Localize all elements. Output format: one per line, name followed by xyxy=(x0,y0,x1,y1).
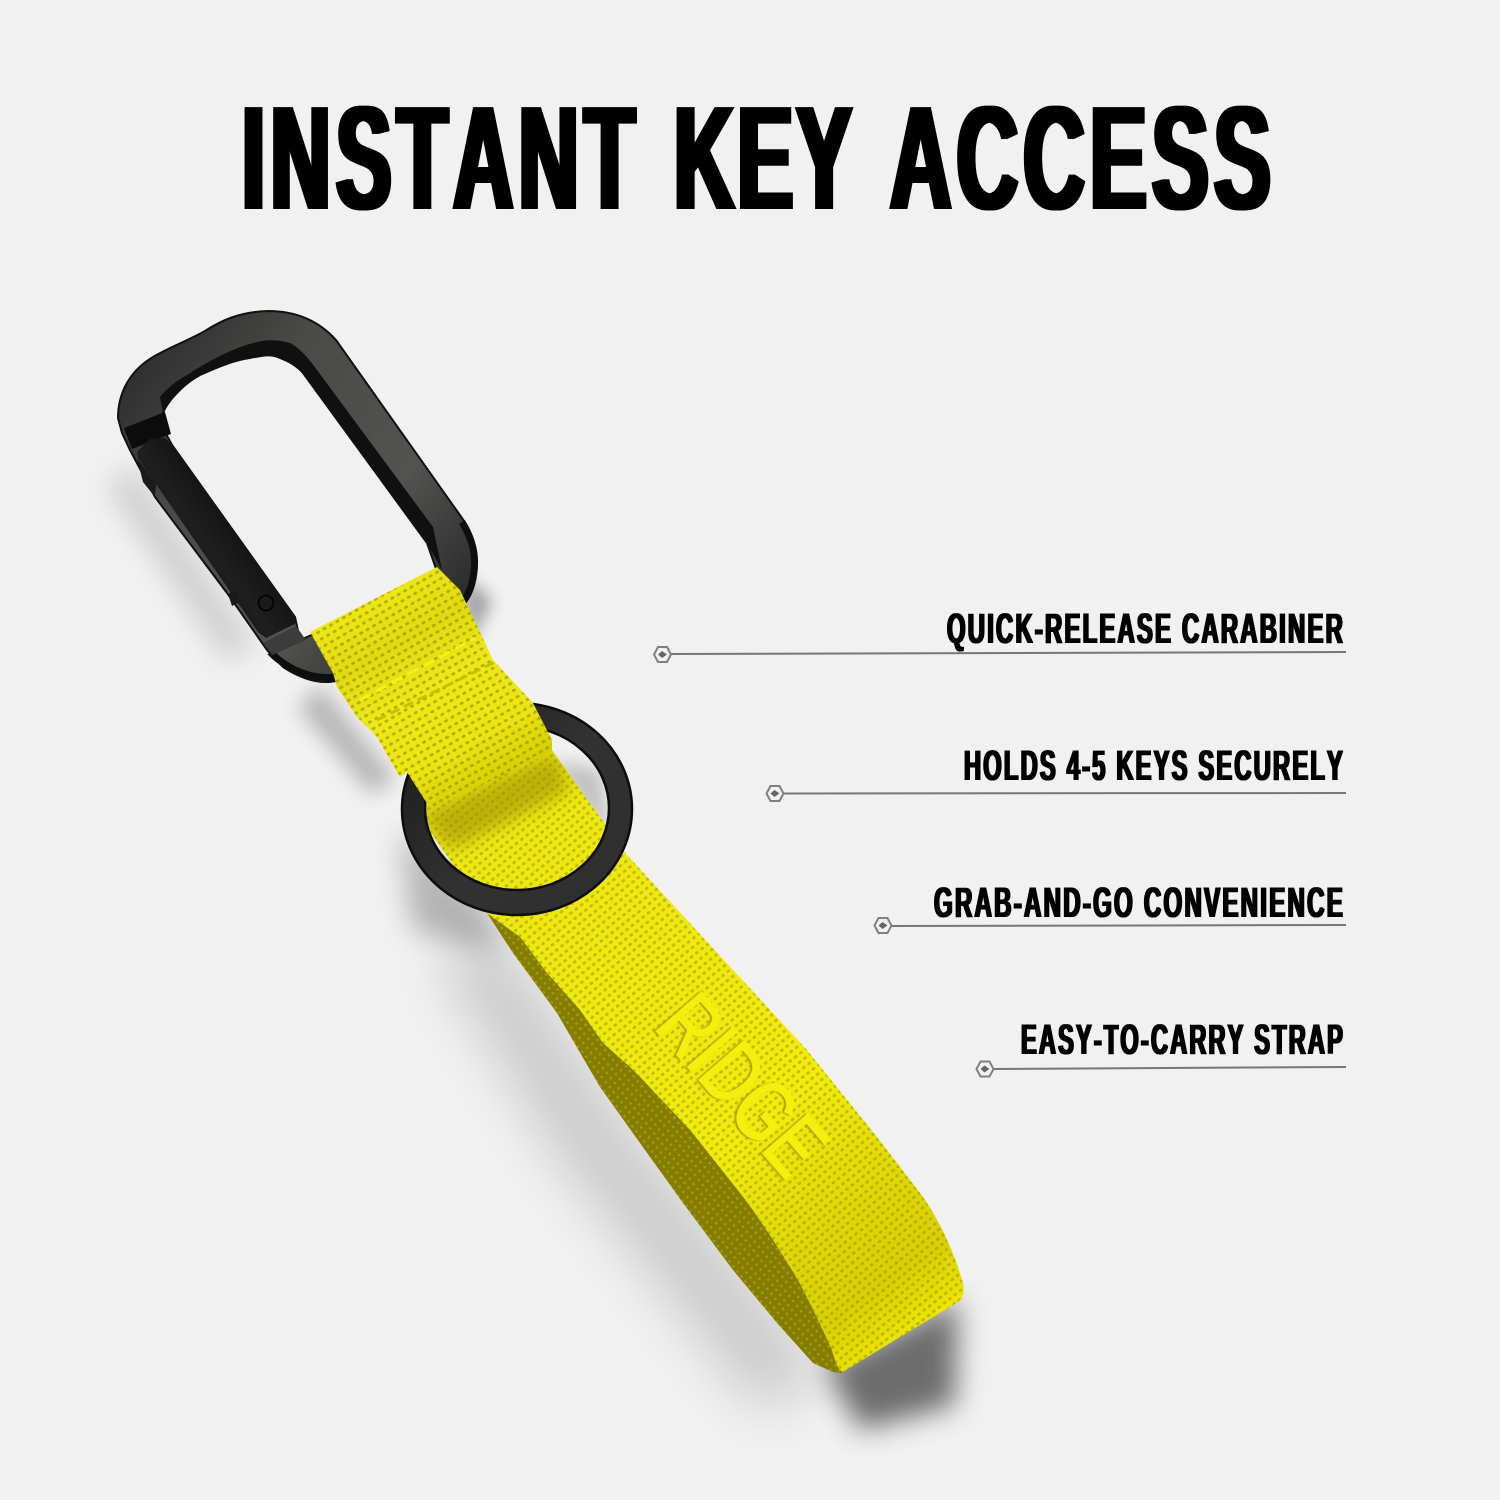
stitch line two xyxy=(377,662,495,720)
leader line xyxy=(784,792,1346,794)
leader line xyxy=(892,925,1346,926)
shadow below fold xyxy=(420,752,570,850)
callout: quick-release carabiner xyxy=(654,605,1346,662)
strap front face xyxy=(415,750,964,1371)
gate notch xyxy=(137,458,240,606)
marker xyxy=(654,647,671,662)
underside weave xyxy=(487,913,842,1373)
cast shadows xyxy=(108,465,958,1430)
strap underside xyxy=(487,913,842,1373)
upper strap and fold xyxy=(310,567,552,808)
marker xyxy=(976,1062,994,1076)
carabiner body xyxy=(118,311,476,682)
upper weave xyxy=(310,567,552,808)
gate rivet xyxy=(258,596,274,610)
carabiner nose band xyxy=(124,412,171,449)
carabiner outer edge xyxy=(270,522,475,678)
stitch line one xyxy=(360,638,475,700)
callout: grab-and-go xyxy=(874,879,1346,933)
lower strap xyxy=(415,750,964,1373)
marker xyxy=(766,786,784,801)
title xyxy=(242,76,1276,241)
carabiner xyxy=(118,311,476,682)
RIDGE embossed logo: RIDGE xyxy=(639,976,846,1194)
gate collar xyxy=(263,626,306,655)
title: INSTANT xyxy=(242,76,640,241)
leader line xyxy=(671,652,1346,654)
callout: easy-to-carry strap xyxy=(976,1016,1346,1076)
carabiner gate xyxy=(137,438,295,638)
leader line xyxy=(994,1067,1346,1069)
strap weave xyxy=(415,750,964,1371)
product: carabiner keychain strap xyxy=(108,311,964,1430)
ring band xyxy=(402,703,632,915)
marker xyxy=(874,918,892,933)
title: KEY xyxy=(674,76,855,241)
carabiner inner bevel xyxy=(160,340,442,570)
split ring xyxy=(402,703,632,915)
callout: holds keys xyxy=(766,742,1346,801)
upper webbing xyxy=(310,567,552,808)
